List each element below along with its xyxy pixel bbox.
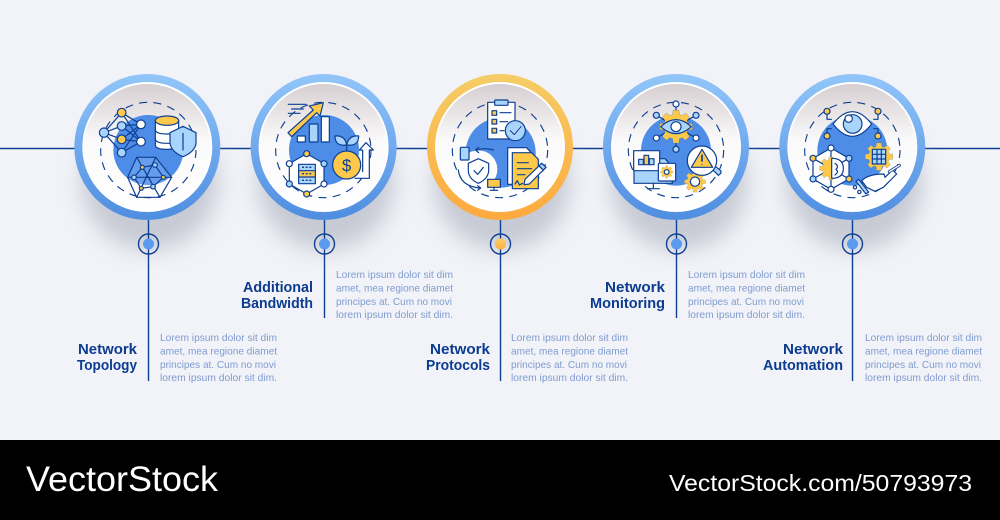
footer url text: VectorStock.com/50793973: [669, 470, 972, 496]
text block: [336, 269, 453, 321]
heading: Network: [605, 279, 666, 296]
heading: Bandwidth: [241, 295, 313, 312]
icon: protocols: [452, 100, 548, 198]
footer logo text: VectorStock: [26, 460, 219, 499]
heading: Network: [430, 341, 491, 358]
blue ring: [603, 74, 749, 220]
text block: [160, 332, 277, 384]
text block: lorem ipsum dolor sit dim.: [688, 309, 805, 321]
heading: Topology: [77, 357, 138, 374]
icon: network topology: [99, 102, 196, 198]
circle shadow: [787, 114, 923, 250]
panel: network topology: [74, 74, 277, 384]
text block: principes at. Cum no movi: [336, 296, 452, 308]
text block: [511, 332, 628, 384]
yellow ring: [427, 74, 573, 220]
text block: Lorem ipsum dolor sit dim: [688, 269, 805, 281]
heading: [763, 341, 844, 374]
blue ring: [74, 74, 220, 220]
icon: bandwidth growth: [276, 102, 373, 198]
heading: Protocols: [426, 357, 490, 374]
text block: [865, 332, 982, 384]
circle interior: [260, 84, 387, 211]
text block: amet, mea regione diamet: [160, 346, 277, 358]
circle interior: [84, 84, 211, 211]
panel: network automation: [763, 74, 982, 384]
heading: [426, 341, 491, 374]
step marker: [138, 220, 158, 381]
step marker: [490, 220, 510, 381]
text block: Lorem ipsum dolor sit dim: [336, 269, 453, 281]
circle interior: [789, 84, 916, 211]
heading: [241, 279, 313, 312]
circle shadow: [258, 114, 394, 250]
circle shadow: [82, 114, 218, 250]
blue ring: [251, 74, 397, 220]
heading: Additional: [243, 279, 313, 296]
text block: principes at. Cum no movi: [511, 359, 627, 371]
heading: Network: [78, 341, 138, 358]
text block: Lorem ipsum dolor sit dim: [160, 332, 277, 344]
text block: lorem ipsum dolor sit dim.: [160, 372, 277, 384]
text block: amet, mea regione diamet: [688, 282, 805, 294]
icon: automation: [805, 102, 900, 198]
circle shadow: [434, 114, 570, 250]
text block: amet, mea regione diamet: [336, 282, 453, 294]
heading: [590, 279, 666, 312]
circle interior: [612, 84, 740, 211]
panel: network protocols: [426, 74, 628, 384]
panel: additional bandwidth: [241, 74, 453, 321]
heading: Network: [783, 341, 844, 358]
blue ring: [779, 74, 925, 220]
text block: principes at. Cum no movi: [160, 359, 276, 371]
text block: amet, mea regione diamet: [865, 346, 982, 358]
text block: Lorem ipsum dolor sit dim: [865, 332, 982, 344]
text block: principes at. Cum no movi: [688, 296, 804, 308]
step marker: [842, 220, 862, 381]
icon: monitoring: [628, 101, 724, 198]
icon: bandwidth growth: $: [342, 156, 351, 175]
heading: Monitoring: [590, 295, 665, 312]
heading: Automation: [763, 357, 843, 374]
panel: network monitoring: [590, 74, 805, 321]
footer bar: [0, 440, 1000, 520]
heading: [77, 341, 138, 374]
step marker: [314, 220, 334, 318]
text block: lorem ipsum dolor sit dim.: [511, 372, 628, 384]
text block: principes at. Cum no movi: [865, 359, 981, 371]
text block: lorem ipsum dolor sit dim.: [336, 309, 453, 321]
circle interior: [436, 84, 564, 211]
text block: [688, 269, 805, 321]
text block: Lorem ipsum dolor sit dim: [511, 332, 628, 344]
circle shadow: [611, 114, 747, 250]
text block: lorem ipsum dolor sit dim.: [865, 372, 982, 384]
horizontal timeline line: [0, 148, 1000, 150]
step marker: [666, 220, 686, 318]
text block: amet, mea regione diamet: [511, 346, 628, 358]
